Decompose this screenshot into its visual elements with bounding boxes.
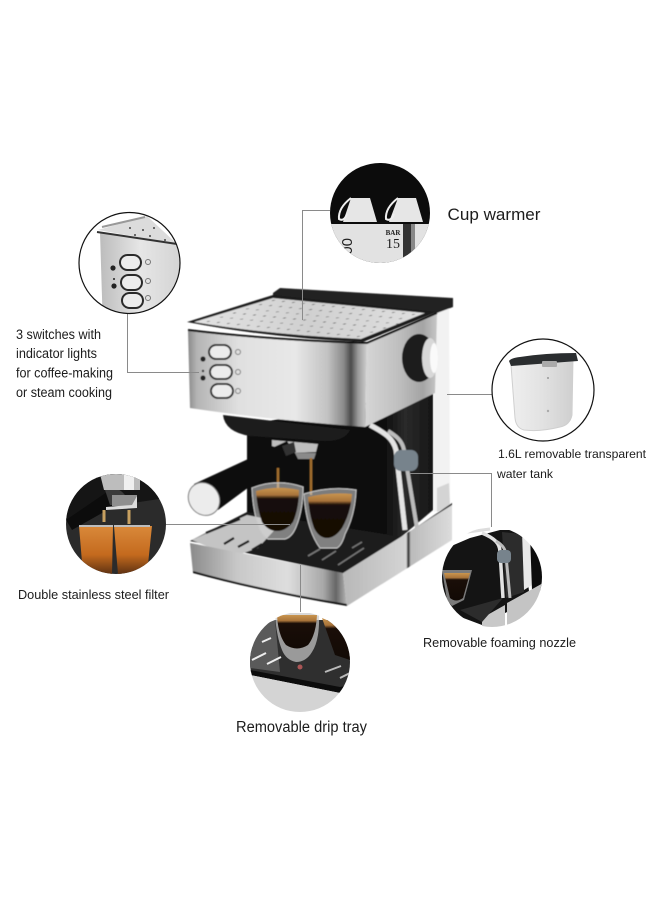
label: double filter: Double stainless steel filter	[18, 588, 170, 602]
circle: double filter	[66, 474, 166, 574]
steam wand grip	[394, 450, 418, 471]
coffee streams	[278, 458, 311, 495]
circle: cup warmer	[330, 163, 430, 264]
steam wand	[370, 425, 405, 530]
label: water tank: 1.6L removable transparent	[498, 447, 647, 461]
right panel	[365, 313, 437, 427]
knob	[402, 334, 436, 382]
group head	[223, 415, 350, 441]
cups	[343, 198, 377, 222]
label: cup warmer: Cup warmer	[448, 205, 541, 224]
label: water tank: water tank	[496, 467, 554, 481]
water tank side	[434, 308, 450, 512]
top plate	[187, 295, 437, 342]
switch buttons	[209, 345, 233, 398]
leader lines	[128, 210, 492, 613]
portafilter handle	[194, 441, 295, 510]
label: switches: or steam cooking	[16, 385, 112, 400]
circle: water tank	[492, 339, 594, 441]
circle: cup warmer: 00	[338, 238, 355, 255]
circle: cup warmer: 15	[386, 237, 400, 252]
label: drip tray: Removable drip tray	[236, 719, 367, 736]
tray front	[190, 543, 347, 606]
circle: drip tray	[250, 612, 350, 712]
front panel	[188, 330, 367, 427]
drip tray top	[190, 503, 452, 574]
bar label: BAR	[386, 229, 401, 237]
coffee cups	[79, 526, 113, 574]
tank lid	[273, 288, 453, 313]
cup left	[252, 483, 303, 539]
label: foaming nozzle: Removable foaming nozzle	[423, 635, 576, 650]
indicator lights	[200, 356, 206, 381]
circle: switches	[78, 212, 181, 314]
label: switches: for coffee-making	[16, 366, 113, 380]
coffee machine photo	[182, 288, 453, 606]
tray right side	[343, 505, 452, 606]
label: switches: 3 switches with	[16, 327, 101, 342]
label: switches: indicator lights	[16, 346, 97, 361]
cup right	[304, 489, 356, 548]
circle: foaming nozzle	[442, 527, 545, 627]
black body	[247, 390, 433, 538]
